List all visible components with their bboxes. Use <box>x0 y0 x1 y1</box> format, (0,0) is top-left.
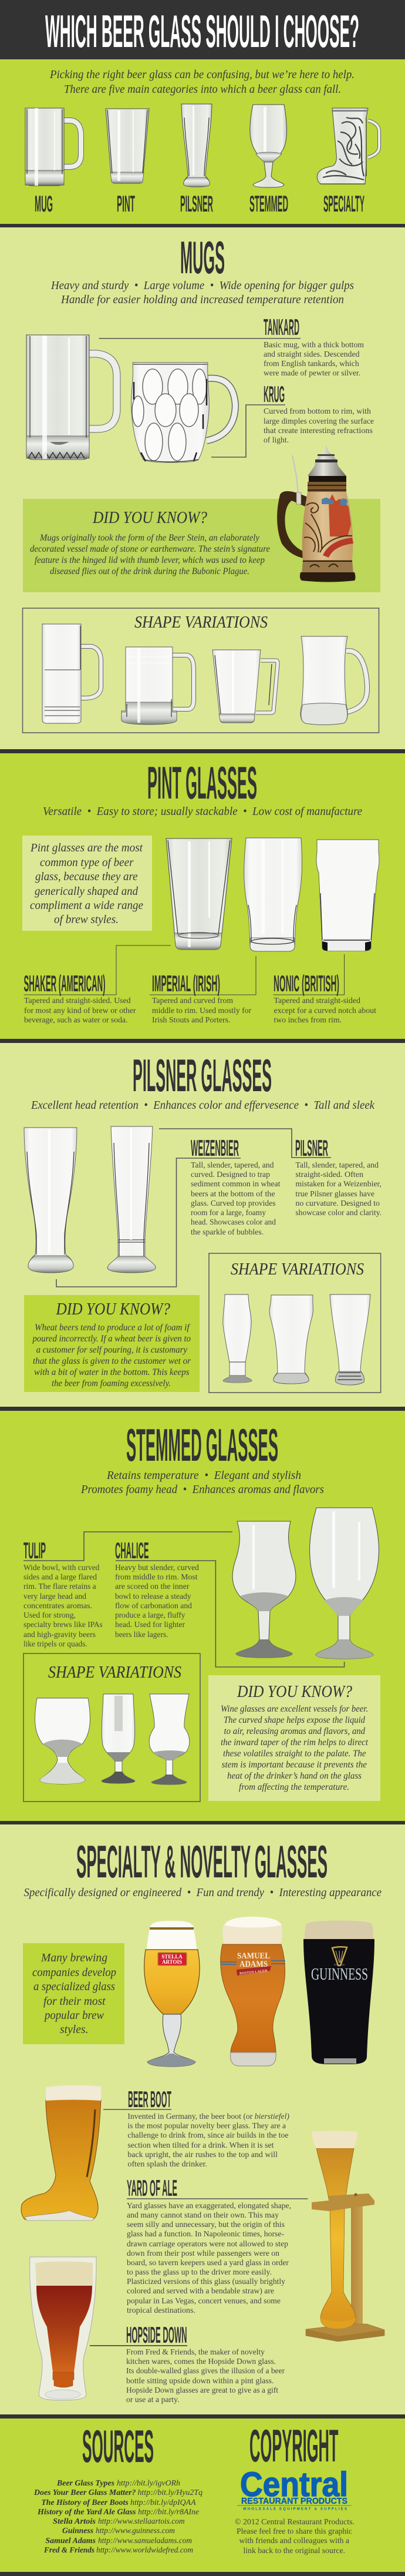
did you know text: with a bit of water in the bottom. This keeps <box>34 1367 189 1377</box>
yard of ale description: tropical destinations. <box>127 2306 195 2315</box>
panel: shape variations mugs <box>22 608 379 733</box>
tulip description: like tripels or quads. <box>23 1640 87 1649</box>
yard of ale glass <box>306 2131 384 2342</box>
pilsner label <box>159 1129 331 1161</box>
pilsner glass <box>107 1126 156 1273</box>
pilsner description: Tall, slender, tapered, and <box>295 1161 379 1170</box>
variation glass 1 <box>42 624 101 723</box>
weizenbier description: beers at the bottom of the <box>191 1190 275 1199</box>
tulip description: Used for strong, <box>23 1611 76 1620</box>
callout: pint intro <box>22 836 152 931</box>
specialty attributes: Specifically designed or engineered • Fun and trendy • Interesting appearance <box>23 1886 382 1899</box>
krug description: large dimples covering the surface <box>264 417 374 426</box>
panel: mugs: KRUG <box>264 382 285 407</box>
yard of ale description: and many cannot stand on their own. This may <box>127 2211 279 2220</box>
tankard description <box>264 341 364 378</box>
panel: shape variations pilsner <box>209 1253 381 1393</box>
yard of ale leader line <box>127 2198 308 2199</box>
did you know text: the beer from foaming excessively. <box>52 1378 171 1388</box>
nonic description: two inches from rim. <box>274 1016 342 1025</box>
variation glass 4 <box>301 636 367 725</box>
did you know text: to air, releasing aromas and flavors, and <box>224 1726 366 1736</box>
yard of ale description: down from their post while passengers were on <box>127 2249 279 2258</box>
weizenbier description: curved. Designed to trap <box>191 1170 270 1179</box>
copyright text: link back to the original source. <box>243 2547 345 2555</box>
tankard description: and straight sides. Descended <box>264 350 359 359</box>
mugs attributes: Heavy and sturdy • Large volume • Wide opening for bigger gulps <box>50 279 354 292</box>
callout: brewing companies: for their most <box>43 1995 106 2008</box>
sources list: http://bit.ly/r8AIne <box>138 2508 199 2517</box>
callout: pint intro: compliment a wide range <box>30 899 143 912</box>
chalice description: bowl to release a steady <box>115 1592 191 1601</box>
chalice description: flow of carbonation and <box>115 1602 192 1611</box>
tulip description: rim. The flare retains a <box>23 1582 96 1591</box>
hopside down glass <box>30 2257 96 2400</box>
panel: mugs <box>0 224 405 749</box>
krug description <box>264 407 374 445</box>
mugs attributes: Handle for easier holding and increased temperature retention <box>60 293 344 306</box>
pilsner leader line <box>159 1129 331 1158</box>
samuel adams glass: BOSTON LAGER <box>239 1969 268 1975</box>
did you know text: that the glass is given to the customer wet or <box>33 1356 191 1366</box>
panel: pint glasses <box>0 749 405 1039</box>
panel: intro: PINT <box>117 192 135 217</box>
tankard description: from English tankards, which <box>264 360 359 368</box>
tulip description: specialty brews like IPAs <box>23 1621 103 1629</box>
tankard description: Basic mug, with a thick bottom <box>264 341 364 350</box>
tulip label: TULIP <box>23 1538 46 1564</box>
icon: boot <box>317 108 379 184</box>
sources list: Beer Glass Types <box>56 2479 115 2488</box>
variation glass 1 <box>223 1294 252 1383</box>
panel: pilsner glasses: WEIZENBIER <box>191 1136 239 1161</box>
beer boot label <box>103 2087 171 2112</box>
tulip description: sides and a large flared <box>23 1573 97 1582</box>
tulip description <box>23 1564 103 1649</box>
krug description: Curved from bottom to rim, with <box>264 407 371 416</box>
did you know text: stem is important because it prevents the <box>222 1760 367 1770</box>
chalice description: beers like lagers. <box>115 1631 168 1639</box>
shaker description: for most any kind of brew or other <box>24 1007 136 1015</box>
yard of ale description: glass had a function. In Napoleonic times, horse- <box>127 2230 284 2239</box>
pilsner description: true Pilsner glasses have <box>295 1190 374 1199</box>
tulip label <box>23 1532 232 1564</box>
callout: brewing companies: styles. <box>60 2023 88 2036</box>
chalice description: are scored on the inner <box>115 1582 190 1591</box>
variation glass 3 <box>212 650 278 723</box>
hopside down description: or use at a party. <box>126 2396 179 2404</box>
panel: footer <box>0 2414 405 2576</box>
panel: shape variations stemmed <box>23 1653 200 1802</box>
tulip description: and high-gravity beers <box>23 1631 96 1639</box>
did you know text: heat of the drinker’s hand on the glass <box>227 1771 362 1781</box>
copyright text: © 2012 Central Restaurant Products. <box>235 2518 355 2527</box>
tankard leader line <box>99 338 301 339</box>
weizenbier description: glass. Curved top provides <box>191 1199 276 1208</box>
yard of ale label: YARD OF ALE <box>127 2176 177 2201</box>
sources list: http://www.stellaartois.com <box>98 2517 185 2526</box>
heading: did you know: DID YOU KNOW? <box>237 1683 352 1701</box>
sources list: Guinness <box>62 2527 94 2535</box>
callout: pint intro: generically shaped and <box>35 885 139 898</box>
did you know text: these volatiles straight to the palate. The <box>223 1749 366 1759</box>
sources list: The History of Beer Boots <box>41 2498 129 2507</box>
did you know text: decorated vessel made of stone or earthenware. The stein’s signature <box>30 544 270 554</box>
panel: specialty and novelty glasses <box>0 1821 405 2414</box>
hopside down description: From Fred & Friends, the maker of novelty <box>126 2348 265 2357</box>
panel: pilsner glasses <box>0 1039 405 1411</box>
weizenbier description: head. Showcases color and <box>191 1218 276 1227</box>
chalice description: produce a large, fluffy <box>115 1611 185 1620</box>
panel: did you know stemmed <box>208 1675 380 1801</box>
pilsner description: no curvature. Designed to <box>295 1199 380 1208</box>
imperial label: IMPERIAL (IRISH) <box>152 971 220 997</box>
imperial description: Irish Stouts and Porters. <box>152 1016 230 1025</box>
intro text: There are five main categories into which a beer glass can fall. <box>64 83 341 96</box>
panel: intro: MUG <box>35 192 53 217</box>
shaker description: Tapered and straight-sided. Used <box>24 997 131 1005</box>
nonic description: except for a curved notch about <box>274 1007 376 1015</box>
header band <box>0 0 405 59</box>
stella artois glass <box>144 1921 200 2067</box>
imperial description: middle to rim. Used mostly for <box>152 1007 251 1015</box>
did you know text <box>32 1323 191 1388</box>
tankard description: were made of pewter or silver. <box>264 369 360 378</box>
krug leader line <box>211 405 285 457</box>
sources list: http://bit.ly/igvORh <box>117 2479 180 2488</box>
did you know text: Wine glasses are excellent vessels for beer. <box>221 1704 368 1714</box>
variation glass 1 <box>35 1698 90 1784</box>
shaker description: beverage, such as water or soda. <box>24 1016 127 1025</box>
sources list: History of the Yard Ale Glass <box>37 2508 136 2517</box>
panel: mugs: MUGS <box>180 232 225 283</box>
tulip description: concentrates aromas. <box>23 1602 92 1611</box>
yard of ale description <box>127 2202 291 2315</box>
stemmed attributes <box>80 1469 324 1496</box>
weizenbier description: Tall, slender, tapered, and <box>191 1161 274 1170</box>
nonic description: Tapered and straight-sided <box>274 997 360 1005</box>
panel: pilsner glasses: PILSNER <box>295 1136 328 1161</box>
stella artois glass: ARTOIS <box>162 1959 182 1965</box>
callout: brewing companies: popular brew <box>43 2009 104 2022</box>
heading: shape variations: SHAPE VARIATIONS <box>134 613 268 632</box>
callout: brewing companies: a specialized glass <box>33 1980 115 1993</box>
did you know text <box>221 1704 369 1792</box>
imperial leader line <box>150 956 256 995</box>
yard of ale description: colored and served with a bendable straw) are <box>127 2287 274 2296</box>
pilsner description <box>295 1161 382 1217</box>
krug description: of light. <box>264 436 289 445</box>
weizenbier description: room for a large, foamy <box>191 1209 266 1217</box>
beer boot description: Invented in Germany, the beer boot (or bierstiefel) <box>127 2112 289 2121</box>
samuel adams glass: ADAMS <box>239 1960 268 1969</box>
variation glass 2 <box>269 1295 313 1384</box>
krug description: that create interesting refractions <box>264 427 373 435</box>
heading: did you know: DID YOU KNOW? <box>56 1300 170 1319</box>
sources list: http://www.guinness.com <box>96 2527 175 2535</box>
did you know text: diseased flies out of the drink during the Bubonic Plague. <box>50 566 249 576</box>
tankard glass <box>26 335 117 459</box>
panel: mugs: TANKARD <box>264 315 299 340</box>
hopside down description: bottle sitting upside down within a pint glass. <box>126 2377 274 2386</box>
stemmed attributes: Retains temperature • Elegant and stylish <box>106 1469 301 1482</box>
sources list: http://bit.ly/dpIQAA <box>130 2498 196 2507</box>
beer boot description: back upright, the air rushes to the top and will <box>127 2151 278 2159</box>
weizenbier label <box>56 1136 241 1287</box>
sources list: Does Your Beer Glass Matter? <box>33 2488 136 2497</box>
callout: brewing companies: companies develop <box>32 1966 116 1979</box>
variation glass 2 <box>122 647 194 724</box>
chalice description: head. Used for lighter <box>115 1621 185 1629</box>
callout: pint intro: common type of beer <box>40 856 134 869</box>
yard of ale description: Yard glasses have an exaggerated, elongated shape, <box>127 2202 291 2211</box>
yard of ale description: board, so tavern keepers used a yard glass in order <box>127 2259 289 2268</box>
did you know text: Wheat beers tend to produce a lot of foam if <box>35 1323 191 1333</box>
chalice description: Heavy but slender, curved <box>115 1564 199 1572</box>
callout: pint intro: glass, because they are <box>35 870 138 883</box>
panel: intro: PILSNER <box>180 192 213 217</box>
nonic glass <box>316 840 379 951</box>
beer boot description: challenge to drink from, since air builds in the toe <box>127 2131 289 2140</box>
chalice description: from middle to rim. Most <box>115 1573 198 1582</box>
mugs attributes <box>50 279 354 306</box>
heading: shape variations: SHAPE VARIATIONS <box>48 1663 181 1682</box>
stemmed attributes: Promotes foamy head • Enhances aromas and flavors <box>80 1483 324 1496</box>
hopside down description: Its double-walled glass gives the illusion of a beer <box>126 2367 285 2376</box>
panel: specialty and novelty glasses: HOPSIDE DOWN <box>126 2323 187 2348</box>
chalice label: CHALICE <box>115 1538 149 1564</box>
beer boot description: often splash the drinker. <box>127 2160 207 2169</box>
copyright text: Please feel free to share this graphic <box>237 2527 352 2536</box>
pilsner description: showcase color and clarity. <box>295 1209 382 1217</box>
did you know text: Mugs originally took the form of the Beer Stein, an elaborately <box>39 533 260 543</box>
yard of ale description: to pass the glass up to the driver more easily. <box>127 2268 272 2277</box>
pilsner description: mistaken for a Weizenbier, <box>295 1180 382 1189</box>
krug glass <box>131 363 235 462</box>
beer boot description: section when tilted for a drink. When it is set <box>127 2141 274 2150</box>
panel: intro <box>0 59 405 224</box>
samuel adams glass: SAMUEL <box>237 1951 270 1961</box>
sources list: http://bit.ly/Hyu2Tq <box>137 2488 203 2497</box>
nonic leader line <box>274 954 345 995</box>
panel: specialty and novelty glasses: BEER BOOT <box>128 2087 171 2112</box>
heading: did you know: DID YOU KNOW? <box>92 509 207 527</box>
pint attributes: Versatile • Easy to store; usually stackable • Low cost of manufacture <box>43 805 362 818</box>
imperial description <box>152 997 251 1025</box>
heading: shape variations: SHAPE VARIATIONS <box>231 1260 364 1279</box>
did you know text: from affecting the temperature. <box>239 1782 349 1792</box>
chalice label <box>115 1538 345 1667</box>
panel: footer: SOURCES <box>82 2420 154 2472</box>
copyright text: with friends and colleagues with a <box>239 2537 350 2545</box>
weizenbier description: sediment common in wheat <box>191 1180 281 1189</box>
stella artois glass: STELLA <box>161 1954 183 1960</box>
shaker description <box>24 997 136 1025</box>
did you know text <box>30 533 270 576</box>
yard of ale description: drawn carriage operators were not allowed to step <box>127 2240 288 2249</box>
copyright text <box>235 2518 355 2555</box>
did you know text: The curved shape helps expose the liquid <box>224 1715 366 1725</box>
shaker label: SHAKER (AMERICAN) <box>23 971 106 997</box>
logo: central restaurant products: WHOLESALE EQUIPMENT & SUPPLIES <box>243 2508 347 2511</box>
variation glass 3 <box>149 1694 190 1785</box>
panel: stemmed glasses <box>0 1407 405 1821</box>
tulip glass <box>232 1521 296 1658</box>
icon: beer stein <box>277 444 356 582</box>
sources list: Stella Artois <box>53 2517 96 2526</box>
sources list: http://www.worldwidefred.com <box>96 2546 193 2555</box>
icon: stemmed <box>250 105 286 187</box>
did you know text: the inward taper of the rim helps to direct <box>221 1738 369 1747</box>
shaker glass <box>166 838 232 950</box>
yard of ale description: popular in Las Vegas, concert venues, and some <box>127 2297 281 2306</box>
imperial description: Tapered and curved from <box>152 997 233 1005</box>
weizenbier description <box>191 1161 281 1237</box>
guinness glass: ESTD 1759 <box>334 1964 345 1966</box>
did you know text: feature is the hinged lid with thumb lever, which was used to keep <box>35 555 265 565</box>
callout: pint intro: Pint glasses are the most <box>30 841 143 854</box>
pilsner description: straight-sided. Often <box>295 1170 363 1179</box>
yard of ale description: Plasticized versions of this glass (usually brightly <box>127 2278 285 2286</box>
beer boot description <box>127 2112 289 2169</box>
callout: pint intro: of brew styles. <box>54 913 119 926</box>
callout: brewing companies: Many brewing <box>41 1951 107 1964</box>
panel: intro: STEMMED <box>249 192 288 217</box>
logo: central restaurant products: Central <box>240 2466 348 2504</box>
tulip leader line <box>23 1532 232 1561</box>
hopside down description: Hopside Down glasses are great to give as a gift <box>126 2386 278 2395</box>
hopside down description <box>126 2348 285 2404</box>
chalice glass <box>310 1508 379 1659</box>
icon: mug <box>25 108 81 186</box>
shaker label <box>23 945 171 997</box>
shaker leader line <box>23 945 171 995</box>
krug label <box>211 382 285 457</box>
variation glass 2 <box>102 1694 135 1783</box>
sources list: http://www.samueladams.com <box>98 2537 192 2545</box>
beer boot description: is the most popular novelty beer glass. They are a <box>127 2122 286 2131</box>
panel: did you know mugs <box>23 499 380 592</box>
samuel adams glass <box>221 1917 285 2066</box>
yard of ale description: seem silly and unnecessary, but the origin of this <box>127 2221 285 2229</box>
imperial glass <box>244 838 302 951</box>
pilsner attributes: Excellent head retention • Enhances color and effervesence • Tall and sleek <box>31 1099 375 1112</box>
chalice description <box>115 1564 199 1639</box>
sources list <box>33 2479 203 2555</box>
guinness glass <box>303 1920 374 2064</box>
intro text: Picking the right beer glass can be confusing, but we’re here to help. <box>49 68 355 81</box>
sources list: Fred & Friends <box>43 2546 95 2555</box>
beer boot leader line <box>103 2109 171 2110</box>
icon: pilsner <box>181 104 212 187</box>
beer boot glass <box>21 2085 101 2221</box>
guinness glass: GUINNESS <box>311 1965 368 1984</box>
hopside down description: kitchen wares, comes the Hopside Down glass. <box>126 2357 276 2366</box>
weizenbier description: the sparkle of bubbles. <box>191 1228 264 1237</box>
weizen glass <box>24 1128 77 1273</box>
sources list: Samuel Adams <box>45 2537 96 2545</box>
nonic label <box>274 954 345 997</box>
did you know text: poured incorrectly. If a wheat beer is given to <box>32 1334 191 1344</box>
intro text <box>49 68 355 96</box>
logo: central restaurant products: RESTAURANT PRODUCTS <box>241 2496 347 2506</box>
weizenbier leader line <box>56 1158 241 1287</box>
icon: pint <box>106 109 149 183</box>
chalice leader line <box>116 1561 345 1667</box>
variation glass 3 <box>330 1294 370 1385</box>
tulip description: very large head and <box>23 1592 86 1601</box>
did you know text: a customer for self pouring, it is customary <box>36 1345 188 1355</box>
callout: brewing companies <box>23 1943 124 2044</box>
imperial label <box>150 956 256 997</box>
panel: did you know pilsner <box>24 1295 200 1392</box>
nonic description <box>274 997 376 1025</box>
tulip description: Wide bowl, with curved <box>23 1564 99 1572</box>
hopside down leader line <box>90 2345 187 2346</box>
